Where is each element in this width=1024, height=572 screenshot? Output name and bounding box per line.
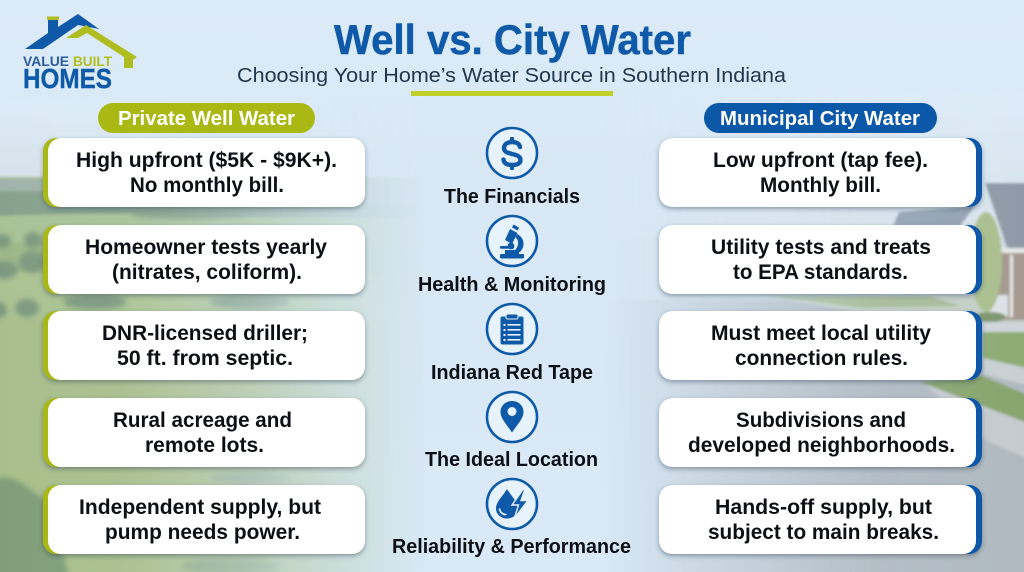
label: Indiana Red Tape: Indiana Red Tape [431, 361, 593, 384]
card: city financials: Low upfront (tap fee). [713, 148, 928, 172]
card: city reliability: Hands-off supply, but [715, 495, 932, 519]
card: well reliability [43, 485, 365, 554]
card: city location [659, 398, 982, 467]
card: well location [43, 398, 365, 467]
card: city red tape: Must meet local utility [711, 321, 931, 345]
background photo: suburban street [642, 181, 1024, 572]
card: well health [43, 225, 365, 294]
heading pill: Private Well Water [98, 103, 315, 133]
card: city health: Utility tests and treats [711, 235, 931, 259]
logo wordmark [23, 53, 112, 94]
label: The Ideal Location: The Ideal Location [425, 448, 598, 471]
card: well location: Rural acreage and [113, 408, 292, 432]
card: well red tape: DNR-licensed driller; [102, 321, 308, 345]
card: well location: remote lots. [145, 433, 264, 457]
panel: center categories [392, 128, 631, 558]
heading pill: Private Well Water: Private Well Water [118, 107, 295, 130]
icon: dollar sign [487, 128, 537, 178]
card: well financials: No monthly bill. [130, 173, 284, 197]
card: city location: Subdivisions and [736, 408, 906, 432]
card: city red tape: connection rules. [735, 346, 908, 370]
card: well reliability: Independent supply, but [79, 495, 321, 519]
title underline [411, 91, 613, 96]
icon: microscope [487, 216, 537, 266]
card: city reliability [659, 485, 982, 554]
card: well financials: High upfront ($5K - $9K+). [76, 148, 337, 172]
card: well health: Homeowner tests yearly [85, 235, 327, 259]
panel: private well water cards [43, 138, 365, 554]
label: Reliability & Performance: Reliability & Performance [392, 535, 631, 558]
icon: house roof logo [25, 14, 137, 68]
card: city health: to EPA standards. [733, 260, 908, 284]
card: city financials [659, 138, 982, 207]
card: well financials [43, 138, 365, 207]
heading pill: Municipal City Water [704, 103, 937, 133]
card: well health: (nitrates, coliform). [112, 260, 302, 284]
panel: municipal city water cards [659, 138, 982, 554]
card: city location: developed neighborhoods. [688, 433, 955, 457]
card: city health [659, 225, 982, 294]
card: well red tape [43, 311, 365, 380]
icon: water drop and lightning bolt [487, 479, 537, 529]
logo wordmark: BUILT [73, 53, 112, 69]
card: city reliability: subject to main breaks. [708, 520, 939, 544]
title: Well vs. City Water [334, 16, 691, 63]
card: well red tape: 50 ft. from septic. [117, 346, 293, 370]
label: Health & Monitoring: Health & Monitoring [418, 273, 606, 296]
logo wordmark: VALUE [23, 53, 69, 69]
background photo: rural farmland [0, 157, 404, 572]
icon: location pin [487, 392, 537, 442]
heading pill: Municipal City Water: Municipal City Water [720, 107, 920, 130]
logo [23, 14, 137, 94]
subtitle: Choosing Your Home’s Water Source in Southern Indiana [237, 64, 787, 87]
label: The Financials: The Financials [444, 185, 580, 208]
card: city red tape [659, 311, 982, 380]
icon: clipboard checklist [487, 304, 537, 354]
card: well reliability: pump needs power. [105, 520, 300, 544]
card: city financials: Monthly bill. [760, 173, 881, 197]
logo wordmark: HOMES [23, 63, 112, 94]
